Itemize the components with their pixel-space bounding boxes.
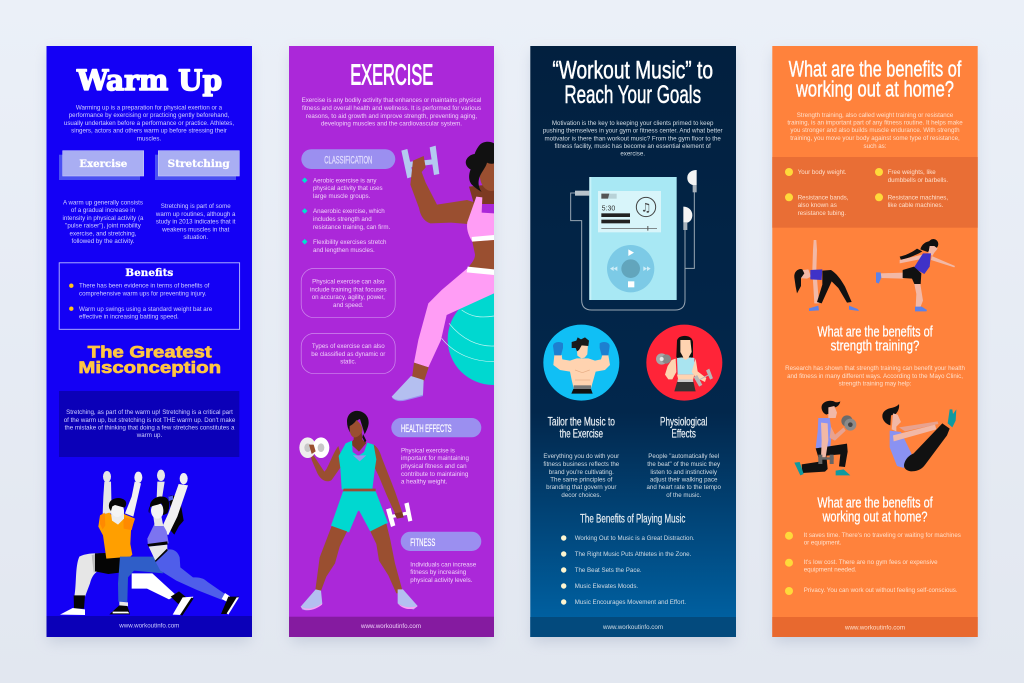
button: Exercise bbox=[59, 151, 144, 180]
panel background bbox=[772, 46, 978, 637]
intro text: usually undertaken before a performance or practice. Athletes, bbox=[64, 120, 234, 127]
callout: misconception text: the mistake of thinking that doing a few stretches constitutes a bbox=[65, 424, 235, 432]
benefits list: Music Encourages Movement and Effort. bbox=[575, 599, 686, 606]
pill: classification: CLASSIFICATION bbox=[324, 154, 372, 166]
intro text: developing muscles and the cardiovascular system. bbox=[321, 120, 462, 128]
text: fitness: physical activity levels. bbox=[410, 577, 473, 584]
text: health effects: Physical exercise is bbox=[401, 448, 455, 454]
intro text: you stronger and also builds muscle endurance. With strength bbox=[790, 127, 960, 134]
text: health effects bbox=[401, 448, 469, 486]
classification bullet list: includes strength and bbox=[313, 216, 372, 223]
illustration: balance pose bbox=[876, 239, 955, 311]
footer: home workout: www.workoutinfo.com bbox=[844, 624, 905, 632]
title: workout music bbox=[552, 56, 713, 109]
text: strength training: strength training may help: bbox=[839, 380, 912, 388]
text: health effects: important for maintaining bbox=[401, 455, 469, 462]
heading: benefits of playing music: The Benefits of Playing Music bbox=[580, 514, 686, 526]
footer: home workout bbox=[772, 617, 978, 637]
illustration: music player: 5:30 bbox=[602, 206, 615, 213]
intro text: Warming up is a preparation for physical exertion or a bbox=[76, 104, 223, 112]
heading: physiological effects: Physiological bbox=[660, 415, 707, 429]
footer: workout music: www.workoutinfo.com bbox=[602, 624, 663, 631]
text box: physical exercise: and speed. bbox=[333, 302, 364, 309]
text: fitness: Individuals can increase bbox=[410, 562, 477, 568]
illustration: triangle pose bbox=[794, 240, 859, 311]
callout: misconception text: warm up. bbox=[136, 432, 162, 439]
heading: the greatest misconception bbox=[78, 343, 221, 377]
text: exercise column bbox=[63, 200, 144, 245]
title: benefits of working out at home: What are the benefits of bbox=[789, 56, 962, 81]
intro text: singers, actors and others warm up before stressing their bbox=[71, 128, 227, 135]
panel: warm up bbox=[46, 46, 252, 637]
classification bullet list: Aerobic exercise is any bbox=[313, 178, 377, 184]
intro text: performance by exercising or practicing gently beforehand, bbox=[69, 112, 230, 119]
benefit bullets: effective in increasing batting speed. bbox=[79, 314, 179, 320]
benefit bullets: There has been evidence in terms of benefits of bbox=[79, 282, 210, 290]
text: tailor the music bbox=[543, 453, 620, 499]
text: physiological effects bbox=[646, 453, 721, 499]
home workout benefits list: It saves time. There's no traveling or waiting for machines bbox=[804, 532, 961, 539]
footer: warm up: www.workoutinfo.com bbox=[118, 623, 179, 630]
heading: the greatest misconception: The Greatest bbox=[88, 343, 212, 362]
band: resistance types bbox=[772, 157, 978, 228]
text: tailor the music: Everything you do with your bbox=[543, 453, 619, 460]
callout: misconception text bbox=[59, 391, 239, 457]
intro text: fitness and overall health and wellness. It is performed for various bbox=[302, 105, 481, 112]
text: stretching column: study in 2013 indicates that it bbox=[156, 219, 236, 226]
pill: health effects bbox=[391, 418, 481, 437]
title: benefits of working out at home bbox=[789, 56, 962, 102]
heading: tailor the music bbox=[548, 415, 615, 440]
heading: tailor the music: Tailor the Music to bbox=[548, 415, 615, 429]
text box: physical exercise: include training that focuses bbox=[310, 286, 387, 294]
illustration: music player: ♫ bbox=[641, 201, 651, 215]
text box: physical exercise: on accuracy, agility, power, bbox=[312, 294, 385, 301]
icon: woman with dumbbells in red circle bbox=[646, 325, 722, 401]
illustration: music player bbox=[571, 170, 697, 310]
benefits list: Working Out to Music is a Great Distraction. bbox=[575, 535, 695, 542]
heading: physiological effects bbox=[660, 415, 707, 440]
heading: tailor the music: the Exercise bbox=[560, 426, 603, 440]
heading: working out at home: What are the benefits of bbox=[817, 494, 933, 511]
callout: misconception text: Stretching, as part of the warm up! Stretching is a critical part bbox=[66, 409, 233, 416]
band: resistance types: dumbbells or barbells. bbox=[888, 177, 948, 184]
panel: workout music bbox=[530, 46, 736, 637]
text: exercise column: followed by the activity. bbox=[71, 238, 135, 245]
text: exercise column: of a gradual increase in bbox=[71, 207, 136, 214]
text: exercise column: "pulse raiser"), joint mobility bbox=[65, 223, 142, 230]
footer: workout music bbox=[530, 617, 736, 637]
panel background bbox=[530, 46, 736, 637]
pill: health effects: HEALTH EFFECTS bbox=[401, 423, 452, 435]
text: strength training bbox=[785, 365, 965, 388]
text box: physical exercise: Physical exercise can also bbox=[312, 278, 385, 286]
classification bullet list: resistance training, can firm. bbox=[313, 224, 390, 231]
text: stretching column bbox=[155, 203, 236, 241]
classification bullet list bbox=[302, 178, 390, 254]
heading: strength training bbox=[817, 324, 933, 355]
band: resistance types: also known as bbox=[798, 202, 837, 209]
intro text: Exercise is any bodily activity that enhances or maintains physical bbox=[302, 97, 481, 104]
heading: the greatest misconception: Misconception bbox=[78, 358, 221, 377]
benefits list: The Right Music Puts Athletes in the Zone. bbox=[575, 551, 692, 558]
text: physiological effects: listen to and instinctively bbox=[650, 469, 718, 476]
panel background bbox=[289, 46, 494, 637]
heading: physiological effects: Effects bbox=[672, 426, 696, 440]
text: strength training: and fitness in many different ways. According to the Mayo Clinic, bbox=[787, 373, 963, 380]
text: tailor the music: The same principles of bbox=[550, 476, 613, 484]
button: Stretching: Stretching bbox=[168, 159, 230, 170]
heading: strength training: What are the benefits of bbox=[817, 324, 933, 341]
title: benefits of working out at home: working out at home? bbox=[795, 77, 954, 102]
text: stretching column: warm up routines, although a bbox=[155, 211, 236, 218]
intro text: pushing themselves in your gym or fitness center. And what better bbox=[543, 128, 723, 134]
classification bullet list: physical activity that uses bbox=[313, 185, 383, 192]
intro text: fitness facility, music has become an essential element of bbox=[555, 143, 711, 150]
pill: classification bbox=[301, 149, 395, 169]
callout: misconception text: of the warm up, but stretching is not THE warm up. Don't make bbox=[64, 417, 236, 424]
button: Exercise: Exercise bbox=[79, 159, 127, 170]
heading: strength training: strength training? bbox=[831, 338, 919, 355]
title: workout music: Reach Your Goals bbox=[564, 81, 701, 109]
intro text: training, is an important part of any fitness routine. It helps make bbox=[787, 120, 963, 126]
text box: physical exercise bbox=[301, 268, 395, 318]
intro text: Motivation is the key to keeping your clients primed to keep bbox=[552, 120, 714, 127]
illustration: standing woman with dumbbells bbox=[299, 411, 418, 610]
text: fitness: fitness by increasing bbox=[410, 569, 467, 576]
text: stretching column: weakens muscles in that bbox=[161, 226, 230, 233]
panel: benefits bbox=[59, 263, 240, 329]
illustration: woman with dumbbell on exercise ball bbox=[392, 142, 494, 402]
intro text: Strength training, also called weight training or resistance bbox=[797, 112, 954, 119]
text: physiological effects: of the music. bbox=[666, 492, 701, 499]
benefit bullets: comprehensive warm ups for preventing injury. bbox=[79, 290, 207, 298]
text: strength training: Research has shown that strength training can benefit your health bbox=[785, 365, 965, 372]
benefit bullets bbox=[69, 282, 213, 320]
benefits list bbox=[561, 535, 695, 606]
benefits list: The Beat Sets the Pace. bbox=[575, 567, 642, 574]
text: tailor the music: fitness business reflects the bbox=[543, 461, 620, 468]
title: Warm Up: Warm Up bbox=[76, 64, 222, 97]
text: exercise column: exercise, and stretching, bbox=[70, 230, 137, 238]
text: physiological effects: adjust their walking pace bbox=[650, 476, 718, 484]
band: resistance types: Your body weight. bbox=[798, 169, 847, 176]
text box: types of exercise: Types of exercise can also bbox=[312, 343, 385, 350]
intro text bbox=[543, 120, 723, 158]
band: resistance types: Resistance machines, bbox=[888, 194, 948, 202]
pill: fitness bbox=[401, 532, 481, 551]
intro text: motivator is there than workout music? From the gym floor to the bbox=[545, 136, 721, 142]
button: Stretching bbox=[155, 151, 239, 180]
text: stretching column: situation. bbox=[183, 234, 208, 241]
pill: fitness: FITNESS bbox=[410, 537, 435, 549]
panel: exercise bbox=[289, 46, 494, 637]
band: resistance types: Free weights, like bbox=[888, 169, 936, 176]
text: tailor the music: branding that govern your bbox=[546, 484, 616, 491]
text: health effects: contribute to maintaining bbox=[401, 471, 469, 478]
intro text bbox=[64, 104, 234, 142]
title: workout music: “Workout Music” to bbox=[552, 56, 713, 84]
text: exercise column: intensity in physical activity (a bbox=[63, 215, 144, 222]
intro text: exercise. bbox=[620, 150, 645, 158]
footer: exercise: www.workoutinfo.com bbox=[360, 623, 421, 630]
illustration: man lunging with dumbbell bbox=[794, 401, 856, 475]
text: physiological effects: and heart rate to the tempo bbox=[646, 484, 721, 491]
intro text bbox=[787, 112, 963, 150]
text: health effects: physical fitness and can bbox=[401, 463, 467, 470]
text box: types of exercise: be classified as dynamic or bbox=[311, 351, 385, 358]
text: stretching column: Stretching is part of some bbox=[161, 203, 231, 210]
intro text: muscles. bbox=[137, 135, 161, 142]
intro text: training, you move your body against some type of resistance, bbox=[790, 135, 960, 142]
text: tailor the music: decor choices. bbox=[561, 492, 601, 499]
text: physiological effects: the beat" of the music they bbox=[647, 461, 721, 468]
intro text: such as: bbox=[864, 143, 887, 150]
illustration: man doing sit-up bbox=[882, 404, 956, 471]
footer: warm up bbox=[46, 616, 252, 637]
text: exercise column: A warm up generally consists bbox=[63, 200, 143, 206]
heading: working out at home bbox=[817, 494, 933, 525]
text: tailor the music: brand you're cultivating. bbox=[549, 469, 614, 476]
panel background bbox=[46, 46, 252, 637]
heading: benefits: Benefits bbox=[125, 268, 174, 279]
benefit bullets: Warm up swings using a standard weight bat are bbox=[79, 306, 213, 313]
text: health effects: a healthy weight. bbox=[401, 478, 448, 486]
classification bullet list: and lengthen muscles. bbox=[313, 247, 375, 254]
band: resistance types: Resistance bands, bbox=[798, 194, 849, 202]
home workout benefits list: It's low cost. There are no gym fees or expensive bbox=[804, 559, 938, 566]
intro text: reasons, to aid growth and improve strength, preventing aging, bbox=[306, 113, 477, 120]
classification bullet list: Anaerobic exercise, which bbox=[313, 208, 385, 215]
classification bullet list: large muscle groups. bbox=[313, 193, 371, 200]
home workout benefits list: equipment needed. bbox=[804, 566, 857, 574]
title: EXERCISE: EXERCISE bbox=[350, 59, 433, 91]
intro text bbox=[302, 97, 481, 128]
home workout benefits list: or equipment. bbox=[804, 540, 842, 546]
home workout benefits list bbox=[785, 532, 961, 595]
icon: boxer in blue circle bbox=[543, 325, 619, 401]
text box: types of exercise: static. bbox=[340, 358, 357, 366]
text box: types of exercise bbox=[301, 333, 395, 374]
heading: working out at home: working out at home? bbox=[822, 508, 928, 525]
footer: exercise bbox=[289, 617, 494, 637]
band: resistance types: resistance tubing. bbox=[798, 210, 846, 217]
classification bullet list: Flexibility exercises stretch bbox=[313, 239, 387, 246]
benefits list: Music Elevates Moods. bbox=[575, 583, 638, 590]
text: physiological effects: People "automatically feel bbox=[648, 453, 719, 460]
band: resistance types: like cable machines. bbox=[888, 202, 944, 209]
home workout benefits list: Privacy. You can work out without feeling self-conscious. bbox=[804, 587, 958, 594]
panel: home workout bbox=[772, 46, 978, 637]
illustration: man and woman lunging bbox=[60, 470, 239, 616]
text: fitness bbox=[410, 562, 477, 584]
